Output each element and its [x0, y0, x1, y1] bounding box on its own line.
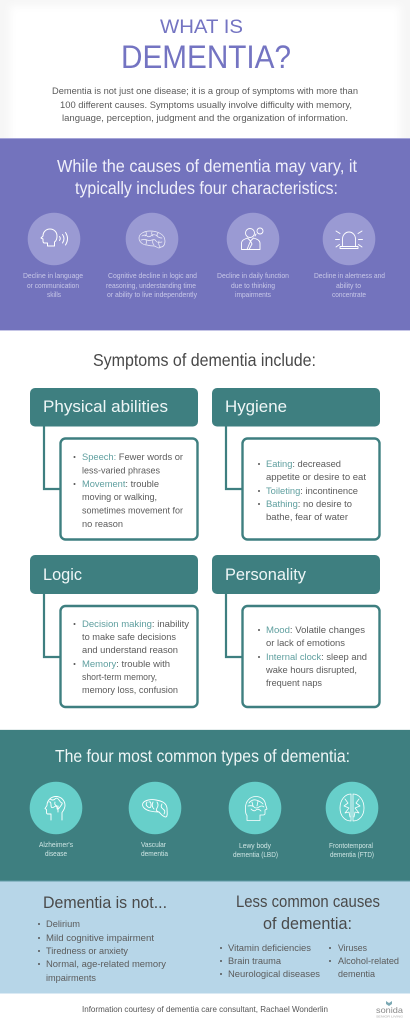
symptom list	[74, 451, 183, 529]
caption: disease	[45, 849, 67, 858]
heading: characteristics: typically includes four characteristics:	[75, 178, 338, 198]
logo: sonida: sonida	[376, 1005, 403, 1015]
caption: Cognitive decline in logic and	[108, 271, 197, 280]
panel: four types	[0, 729, 410, 881]
caption: dementia (LBD)	[233, 850, 278, 859]
card: personality	[212, 555, 380, 707]
list: less common causes: Alcohol-related	[338, 955, 399, 966]
logo: sonida	[376, 1001, 403, 1018]
symptom list	[258, 458, 366, 522]
symptom list: bathe, fear of water	[266, 511, 348, 522]
caption	[106, 271, 197, 299]
caption: Decline in daily function	[217, 271, 289, 280]
caption	[329, 841, 374, 859]
icon: brain top view	[340, 794, 364, 821]
caption: due to thinking	[231, 281, 275, 290]
symptom list: Internal clock: sleep and	[266, 651, 367, 662]
caption: concentrate	[332, 290, 366, 299]
card: logic: Logic	[43, 565, 82, 584]
symptom list: Eating: decreased	[266, 458, 341, 469]
list: less common causes: dementia	[338, 968, 376, 979]
type: vascular	[129, 782, 181, 858]
caption	[233, 841, 278, 859]
caption	[217, 271, 289, 299]
icon: alarm light	[336, 231, 362, 248]
card: physical abilities	[30, 388, 198, 540]
symptom list: Decision making: inability	[82, 618, 189, 629]
caption	[39, 840, 73, 858]
icon: head profile with brain	[245, 796, 267, 820]
heading: characteristics	[57, 156, 357, 198]
card: hygiene: Hygiene	[225, 397, 287, 416]
type: Alzheimer's	[30, 782, 82, 858]
symptom list: short-term memory,	[82, 671, 157, 682]
caption	[141, 840, 168, 858]
type: Lewy body	[229, 782, 281, 859]
symptom list: no reason	[82, 518, 123, 529]
caption: ability to	[336, 281, 361, 290]
icon: brain	[143, 800, 167, 817]
heading: dementia is not: Dementia is not...	[43, 893, 167, 912]
caption	[314, 271, 385, 299]
list: less common causes: Brain trauma	[228, 955, 282, 966]
card: personality: Personality	[225, 565, 306, 584]
list: less common causes	[220, 942, 399, 979]
caption: reasoning, understanding time	[106, 281, 196, 290]
intro text: language, perception, judgment and the organization of information.	[62, 113, 348, 124]
caption: Decline in language	[23, 271, 83, 280]
list: dementia is not: Tiredness or anxiety	[46, 945, 128, 956]
symptom list: Bathing: no desire to	[266, 498, 352, 509]
symptom list: memory loss, confusion	[82, 684, 178, 695]
caption: dementia (FTD)	[330, 850, 374, 859]
list: dementia is not: Mild cognitive impairment	[46, 932, 154, 943]
symptom list	[74, 618, 189, 695]
footer credit: Information courtesy of dementia care consultant, Rachael Wonderlin	[82, 1004, 328, 1014]
intro text	[52, 86, 358, 124]
symptom list: Movement: trouble	[82, 478, 159, 489]
card: hygiene	[212, 388, 380, 540]
symptom list: Toileting: incontinence	[266, 485, 358, 496]
icon: brain	[139, 231, 165, 248]
icon: head with brain	[45, 796, 65, 820]
characteristic: daily function	[217, 213, 289, 299]
caption: dementia	[141, 849, 168, 858]
symptom list: frequent naps	[266, 677, 322, 688]
characteristic: logic	[106, 213, 197, 299]
heading: less common causes: of dementia:	[263, 914, 352, 933]
list: dementia is not	[38, 918, 166, 983]
caption: impairments	[235, 290, 271, 299]
heading: less common causes	[236, 892, 380, 933]
caption: Lewy body	[239, 841, 271, 850]
title	[121, 17, 291, 75]
intro text: Dementia is not just one disease; it is a group of symptoms with more than	[52, 86, 358, 97]
list: less common causes: Viruses	[338, 942, 367, 953]
list: less common causes: Vitamin deficiencies	[228, 942, 311, 953]
list: less common causes: Neurological diseases	[228, 968, 320, 979]
caption: or ability to live independently	[107, 290, 197, 299]
caption: or communication	[27, 281, 79, 290]
characteristic: alertness	[314, 213, 385, 299]
symptom list: or lack of emotions	[266, 637, 345, 648]
title: WHAT IS	[160, 17, 243, 38]
header panel	[0, 0, 410, 151]
title: DEMENTIA?	[121, 39, 291, 75]
list: dementia is not: impairments	[46, 972, 96, 983]
intro text: 100 different causes. Symptoms usually involve difficulty with memory,	[60, 100, 352, 111]
heading: symptoms: Symptoms of dementia include:	[93, 350, 316, 370]
symptom list: and understand reason	[82, 644, 178, 655]
type: frontotemporal	[326, 782, 378, 859]
heading: characteristics: While the causes of dementia may vary, it	[57, 156, 357, 176]
caption: Decline in alertness and	[314, 271, 385, 280]
caption	[23, 271, 83, 299]
caption: Frontotemporal	[329, 841, 373, 850]
symptom list: less-varied phrases	[82, 464, 160, 476]
symptom list: wake hours disrupted,	[265, 664, 357, 675]
icon: thinking person	[242, 228, 263, 250]
characteristic: language	[23, 213, 83, 299]
symptom list	[258, 624, 367, 688]
list: dementia is not: Normal, age-related memory	[46, 958, 166, 969]
symptom list: Mood: Volatile changes	[266, 624, 365, 635]
list: dementia is not: Delirium	[46, 918, 80, 929]
symptom list: appetite or desire to eat	[266, 471, 366, 482]
card: physical abilities: Physical abilities	[43, 397, 168, 416]
symptom list: to make safe decisions	[82, 631, 176, 642]
caption: Vascular	[141, 840, 167, 849]
heading: less common causes: Less common causes	[236, 892, 380, 911]
logo: sonida: SENIOR LIVING	[376, 1014, 403, 1018]
caption: skills	[47, 290, 61, 299]
panel: four characteristics	[0, 138, 410, 331]
symptom list: moving or walking,	[82, 491, 157, 502]
panel: not dementia and less common causes	[0, 880, 410, 994]
symptom list: Speech: Fewer words or	[82, 451, 183, 462]
caption: Alzheimer's	[39, 840, 73, 849]
card: logic	[30, 555, 198, 707]
icon: speaking head	[41, 229, 68, 246]
heading: types: The four most common types of dementia:	[55, 746, 350, 766]
symptom list: sometimes movement for	[82, 504, 183, 516]
symptom list: Memory: trouble with	[82, 658, 170, 669]
